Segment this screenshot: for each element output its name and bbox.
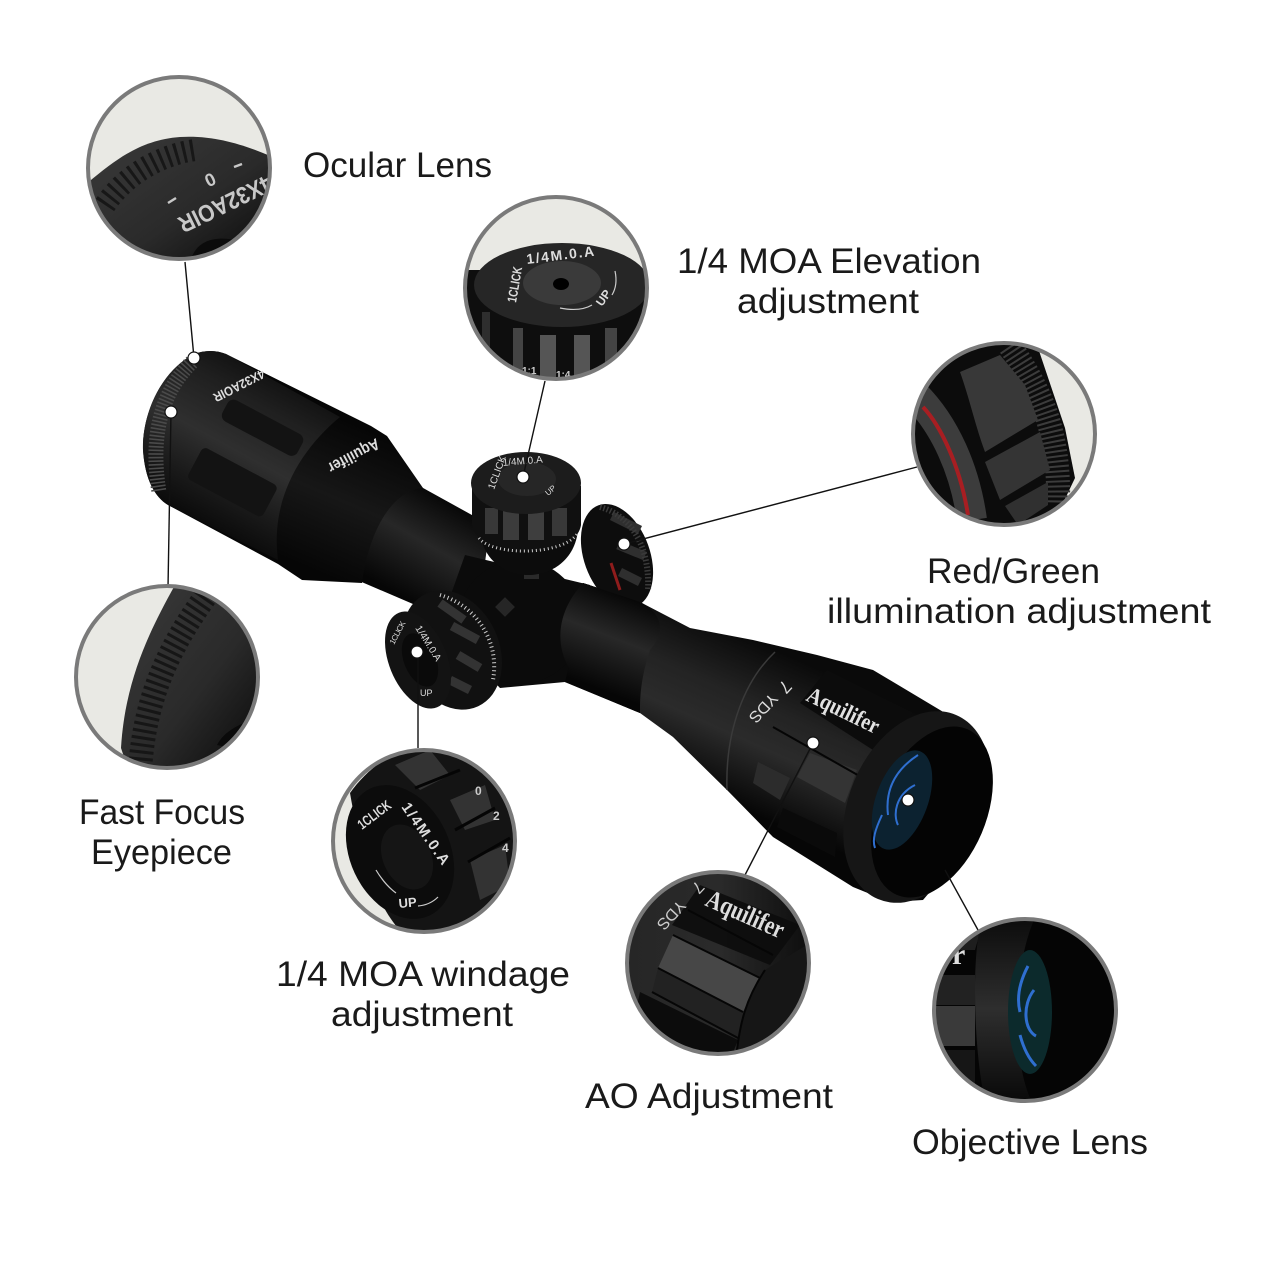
upper recess	[219, 397, 306, 458]
label: elevation: 1/4 MOA Elevation	[677, 242, 981, 281]
leader lines	[168, 262, 978, 930]
label: objective: Objective Lens	[912, 1123, 1148, 1162]
callout: AO	[625, 870, 815, 1060]
callout: elevation: 1:4	[556, 370, 571, 381]
grip block dark	[777, 808, 837, 857]
callout: illumination	[911, 341, 1097, 527]
brand patch	[800, 670, 913, 750]
windage turret	[372, 574, 521, 726]
ocular brand marking: Aquilifer	[325, 434, 382, 476]
callout: windage: UP	[398, 894, 418, 911]
label: eyepiece	[79, 793, 245, 872]
callout: windage: 1CLICK	[354, 797, 394, 832]
callout: AO: 7	[688, 877, 708, 897]
callout: eyepiece	[76, 585, 265, 775]
ocular cone	[143, 351, 423, 583]
label: windage: adjustment	[331, 995, 513, 1034]
callout: windage	[331, 748, 517, 934]
label: illumination	[827, 552, 1211, 631]
objective lens glass	[860, 742, 944, 858]
callout: elevation	[465, 197, 650, 390]
lens reflections	[874, 755, 918, 848]
tube over hub	[560, 583, 640, 713]
ocular knurled ring	[156, 362, 192, 492]
ocular model marking: 4X32AOIR	[210, 366, 267, 405]
lower recess	[186, 446, 278, 518]
callout: windage: 2	[493, 809, 500, 823]
callout: objective	[930, 915, 1116, 1101]
callout: windage: 1/4M.0.A	[398, 800, 453, 868]
turret hub	[440, 555, 590, 688]
grip block mid	[753, 762, 790, 800]
ocular bell	[143, 351, 340, 560]
callout: windage: 0	[475, 784, 482, 798]
grip block light	[797, 753, 857, 803]
AO ring edge	[727, 652, 775, 790]
label: windage	[276, 955, 570, 1034]
AO brand text: Aquilifer	[803, 682, 884, 739]
label: AO: AO Adjustment	[585, 1077, 833, 1116]
callout: elevation: 1/4M.0.A	[525, 243, 595, 267]
yards numeral: 7	[774, 676, 796, 697]
objective hood	[815, 688, 1019, 926]
label: ocular lens: Ocular Lens	[303, 146, 492, 185]
illumination knob	[568, 494, 666, 618]
grip groove	[773, 727, 870, 782]
objective bell	[543, 583, 988, 902]
callout: AO: YDS	[653, 896, 689, 933]
callout: ocular lens	[85, 77, 277, 270]
elevation turret: 1CLICK	[486, 454, 509, 491]
callout: windage: 4	[502, 841, 509, 855]
central tube, ocular side	[356, 478, 490, 607]
objective hood interior	[847, 708, 1017, 916]
callout: AO: Aquilifer	[702, 884, 789, 944]
label: eyepiece: Eyepiece	[91, 833, 232, 872]
label: illumination: Red/Green	[927, 552, 1100, 591]
elevation turret: UP	[544, 483, 558, 498]
label: elevation	[677, 242, 981, 321]
windage turret: 1CLICK	[388, 619, 408, 646]
windage turret: UP	[420, 688, 433, 698]
callout: elevation: 1:1	[522, 366, 537, 377]
elevation turret	[471, 452, 581, 575]
label: eyepiece: Fast Focus	[79, 793, 245, 832]
leader dots	[165, 352, 914, 806]
elevation turret: 1/4M.0.A	[502, 455, 543, 469]
callout: objective: r	[952, 938, 965, 971]
yards text: YDS	[745, 689, 781, 726]
label: elevation: adjustment	[737, 282, 919, 321]
callout: elevation: UP	[593, 287, 614, 309]
callout: elevation: 1CLICK	[504, 265, 525, 304]
callout: ocular lens: 0	[201, 168, 219, 191]
label: windage: 1/4 MOA windage	[276, 955, 570, 994]
label: illumination: illumination adjustment	[827, 592, 1211, 631]
callout: ocular lens: 4X32AOIR	[174, 169, 277, 238]
windage turret: 1/4M.0.A	[412, 624, 443, 664]
objective tube section	[543, 583, 660, 713]
rifle scope	[143, 351, 1019, 926]
